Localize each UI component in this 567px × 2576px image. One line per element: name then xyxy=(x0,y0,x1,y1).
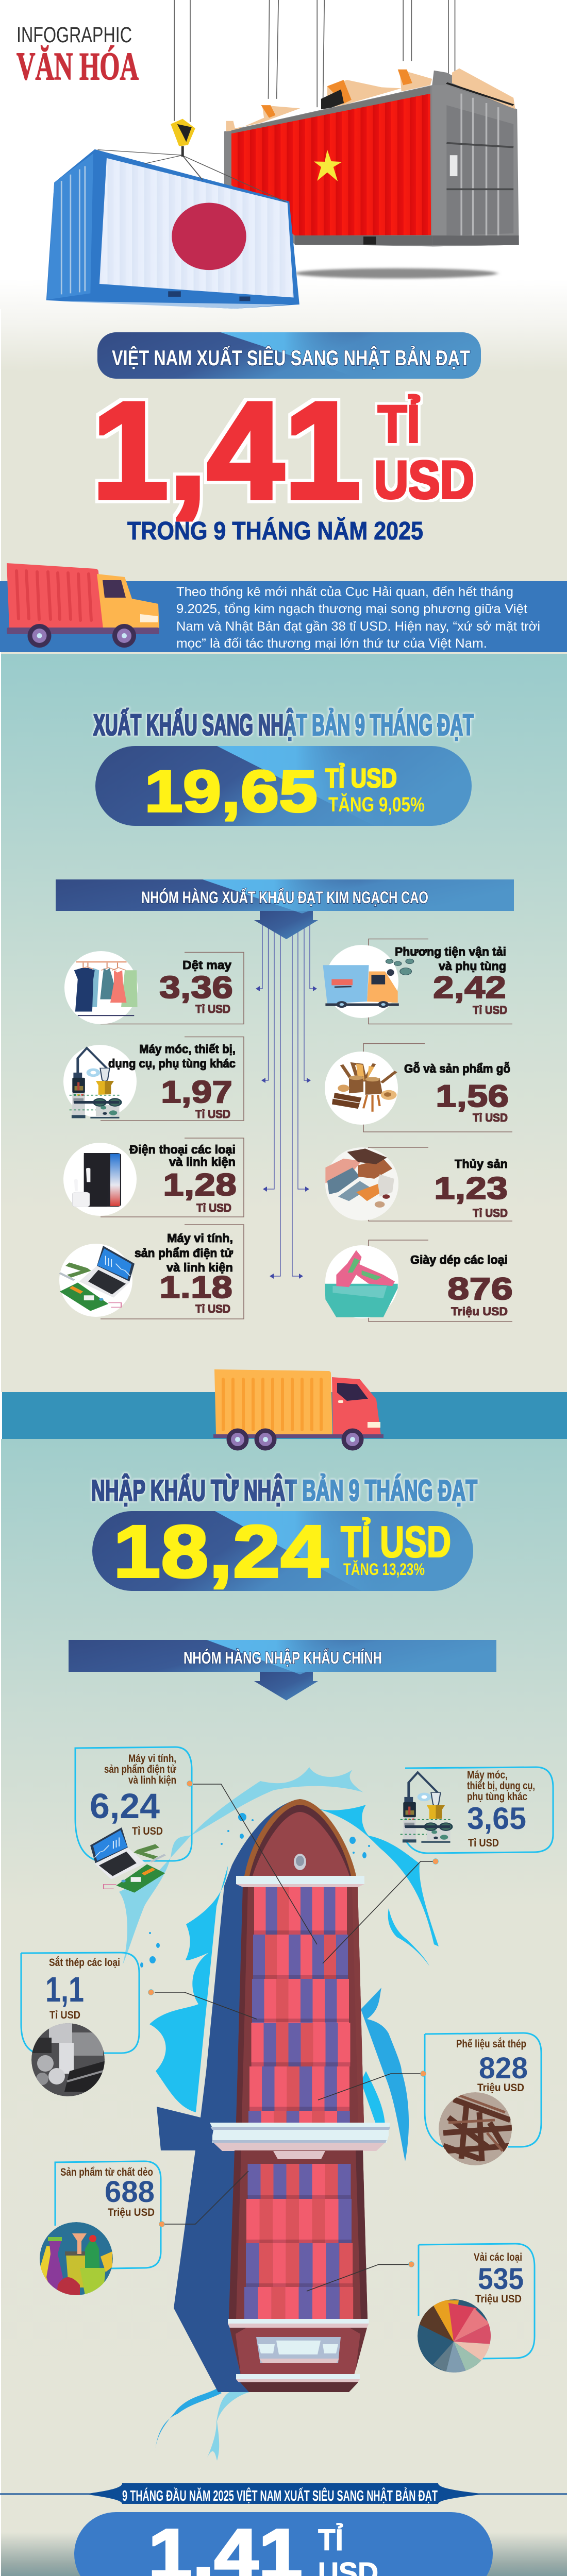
export value pill: 19,65 xyxy=(144,759,318,824)
card: machinery export: 1,97 xyxy=(161,1075,232,1109)
logo: Infographic Văn Hóa: INFOGRAPHIC xyxy=(16,23,132,47)
intro paragraph: Theo thống kê mới nhất của Cục Hải quan, đến hết tháng xyxy=(176,585,513,599)
card: computers xyxy=(59,1225,244,1319)
intro paragraph xyxy=(176,585,540,651)
crane ropes xyxy=(174,0,455,122)
card: seafood: Thủy sản xyxy=(455,1157,508,1171)
icon: seafood xyxy=(325,1147,398,1221)
card: phones: Điện thoại các loại xyxy=(129,1143,236,1156)
subtitle: TRONG 9 THÁNG NĂM 2025 xyxy=(127,517,423,545)
card: seafood: 1,23 xyxy=(434,1171,508,1206)
callout: scrap steel: Phế liệu sắt thép xyxy=(456,2038,526,2050)
icon: machine xyxy=(401,1772,452,1843)
bow deck xyxy=(244,1799,356,1876)
card: vehicles: và phụ tùng xyxy=(439,959,506,973)
icon: smartphone xyxy=(63,1143,137,1216)
aft hull xyxy=(229,2150,368,2319)
Vietnam container xyxy=(224,69,519,246)
card: computers: và linh kiện xyxy=(166,1261,233,1274)
callout: machinery import: Tỉ USD xyxy=(468,1837,499,1849)
card: computers: sản phẩm điện tử xyxy=(135,1246,233,1260)
callout: machinery import xyxy=(401,1767,553,1853)
export value pill: TỈ USD xyxy=(325,763,397,793)
callout: machinery import: Máy móc, xyxy=(467,1769,508,1781)
card: machinery export: Máy móc, thiết bị, xyxy=(139,1042,236,1056)
card: wood: Tỉ USD xyxy=(473,1111,508,1124)
closing value pill: TỈ xyxy=(318,2523,343,2557)
title banner: VIỆT NAM XUẤT SIÊU SANG NHẬT BẢN ĐẠT xyxy=(112,345,470,370)
headline figure 1,41 tỉ USD: TỈ xyxy=(378,395,420,453)
callout: machinery import: 3,65 xyxy=(467,1801,526,1836)
forward container rows xyxy=(248,1887,351,2123)
intro paragraph: mọc” là đối tác thương mại lớn thứ tư của Việt Nam. xyxy=(176,636,487,651)
card: textile: Dệt may xyxy=(182,958,231,972)
card: machinery export xyxy=(63,1037,244,1121)
import value pill: 18,24 xyxy=(113,1510,328,1593)
export group banner with arrow: NHÓM HÀNG XUẤT KHẨU ĐẠT KIM NGẠCH CAO xyxy=(141,888,428,907)
title banner xyxy=(97,332,481,379)
card: vehicles: 2,42 xyxy=(433,970,506,1005)
card: seafood: Tỉ USD xyxy=(473,1207,508,1219)
callout: plastics: 688 xyxy=(105,2175,155,2209)
icon: timber xyxy=(325,1052,398,1125)
icon: clothes xyxy=(64,951,138,1024)
logo: Infographic Văn Hóa: VĂN HÓA xyxy=(16,45,139,88)
photo: fabric swatches xyxy=(418,2299,492,2372)
callout: plastics xyxy=(40,2161,161,2295)
card: footwear: 876 xyxy=(447,1272,513,1306)
crane hook xyxy=(171,119,195,157)
callout: computers: và linh kiện xyxy=(128,1774,176,1786)
export group banner with arrow xyxy=(56,879,514,939)
photo: scrap metal xyxy=(439,2092,513,2165)
card: computers: Máy vi tính, xyxy=(167,1231,233,1245)
closing value pill xyxy=(74,2512,493,2576)
Japan container xyxy=(46,149,299,309)
card: footwear: Triệu USD xyxy=(451,1305,508,1318)
export value pill: TĂNG 9,05% xyxy=(328,793,425,816)
headline figure 1,41 tỉ USD: 1,41 xyxy=(92,373,361,528)
callout: scrap steel: Triệu USD xyxy=(477,2082,524,2094)
aft container rows xyxy=(244,2164,353,2319)
callout: computers: Máy vi tính, xyxy=(128,1753,176,1765)
callout: steel: 1,1 xyxy=(45,1970,84,2009)
stern xyxy=(228,2319,369,2392)
intro band xyxy=(0,581,567,652)
card: computers: Tỉ USD xyxy=(195,1302,230,1315)
icon: machine xyxy=(63,1045,137,1118)
callout: computers: 6,24 xyxy=(90,1786,160,1826)
forward hull xyxy=(236,1887,364,2123)
callout: computers: sản phẩm điện tử xyxy=(104,1764,177,1775)
callout: scrap steel xyxy=(425,2033,541,2165)
import group banner with arrow: NHÓM HÀNG NHẬP KHẨU CHÍNH xyxy=(184,1649,382,1667)
card: wood xyxy=(325,1044,512,1132)
card: phones: Tỉ USD xyxy=(196,1201,231,1214)
card: wood: Gỗ và sản phẩm gỗ xyxy=(404,1061,510,1075)
water splashes around ship xyxy=(119,1767,439,2461)
leader lines to containers xyxy=(148,1781,438,2291)
card: textile: Tỉ USD xyxy=(195,1003,230,1015)
intro paragraph: 9.2025, tổng kim ngạch thương mại song phương giữa Việt xyxy=(176,602,527,616)
export value pill xyxy=(95,746,472,835)
callout: computers: Tỉ USD xyxy=(132,1825,163,1837)
card: vehicles: Phương tiện vận tải xyxy=(395,945,506,958)
ship shadow xyxy=(157,1799,330,2392)
import value pill xyxy=(92,1511,473,1591)
callout: plastics: Sản phẩm từ chất dẻo xyxy=(60,2166,153,2178)
callout: steel: Tỉ USD xyxy=(49,2009,80,2021)
cargo ship xyxy=(157,1799,390,2392)
card: machinery export: dụng cụ, phụ tùng khác xyxy=(108,1057,236,1070)
callout: fabrics: Vải các loại xyxy=(474,2251,522,2263)
card: machinery export: Tỉ USD xyxy=(195,1108,230,1121)
headline figure 1,41 tỉ USD: USD xyxy=(374,450,474,510)
logo: Infographic Văn Hóa xyxy=(16,23,139,88)
card: seafood xyxy=(325,1147,512,1221)
callout: machinery import: phụ tùng khác xyxy=(467,1791,527,1803)
callout: scrap steel: 828 xyxy=(479,2052,528,2085)
card: phones: và linh kiện xyxy=(169,1155,236,1168)
card: computers: 1.18 xyxy=(159,1270,232,1304)
callout: fabrics: Triệu USD xyxy=(475,2293,522,2305)
import band xyxy=(2,1392,567,1439)
icon: red truck xyxy=(7,563,159,648)
callout: steel xyxy=(21,1953,139,2096)
card: vehicles xyxy=(323,939,512,1024)
container sling xyxy=(97,150,286,202)
card: textile xyxy=(64,951,244,1024)
import value pill: TĂNG 13,23% xyxy=(343,1560,425,1579)
photo: steel bars xyxy=(31,2022,106,2096)
callout: plastics: Triệu USD xyxy=(108,2207,155,2218)
photo: plastic goods xyxy=(40,2222,113,2295)
callout: fabrics: 535 xyxy=(478,2262,524,2296)
card: wood: 1,56 xyxy=(436,1079,509,1113)
hero illustration: hanging containers xyxy=(46,0,519,309)
icon: laptop xyxy=(90,1827,165,1893)
callout: fabrics xyxy=(418,2244,535,2372)
card: vehicles: Tỉ USD xyxy=(473,1004,507,1016)
callout: computers xyxy=(75,1747,192,1893)
card: footwear xyxy=(325,1240,513,1321)
top deck bar xyxy=(236,1876,364,1887)
closing ribbon xyxy=(0,2483,567,2504)
superstructure xyxy=(210,2123,390,2151)
export connector lines xyxy=(256,917,317,1279)
icon: shoes xyxy=(325,1245,398,1318)
card: textile: 3,36 xyxy=(159,970,233,1005)
callout: steel: Sắt thép các loại xyxy=(49,1956,120,1969)
icon: orange truck xyxy=(213,1369,383,1451)
callout: machinery import: thiết bị, dụng cụ, xyxy=(467,1780,535,1792)
card: footwear: Giày dép các loại xyxy=(410,1253,508,1266)
card: phones xyxy=(63,1138,244,1217)
icon: laptop xyxy=(59,1244,135,1317)
container shadow xyxy=(295,268,497,278)
card: phones: 1,28 xyxy=(163,1167,237,1202)
intro paragraph: Nam và Nhật Bản đạt gần 38 tỉ USD. Hiện nay, “xứ sở mặt trời xyxy=(176,619,540,634)
icon: delivery truck xyxy=(323,945,414,1018)
import value pill: TỈ USD xyxy=(341,1517,451,1567)
import group banner with arrow xyxy=(69,1640,496,1700)
